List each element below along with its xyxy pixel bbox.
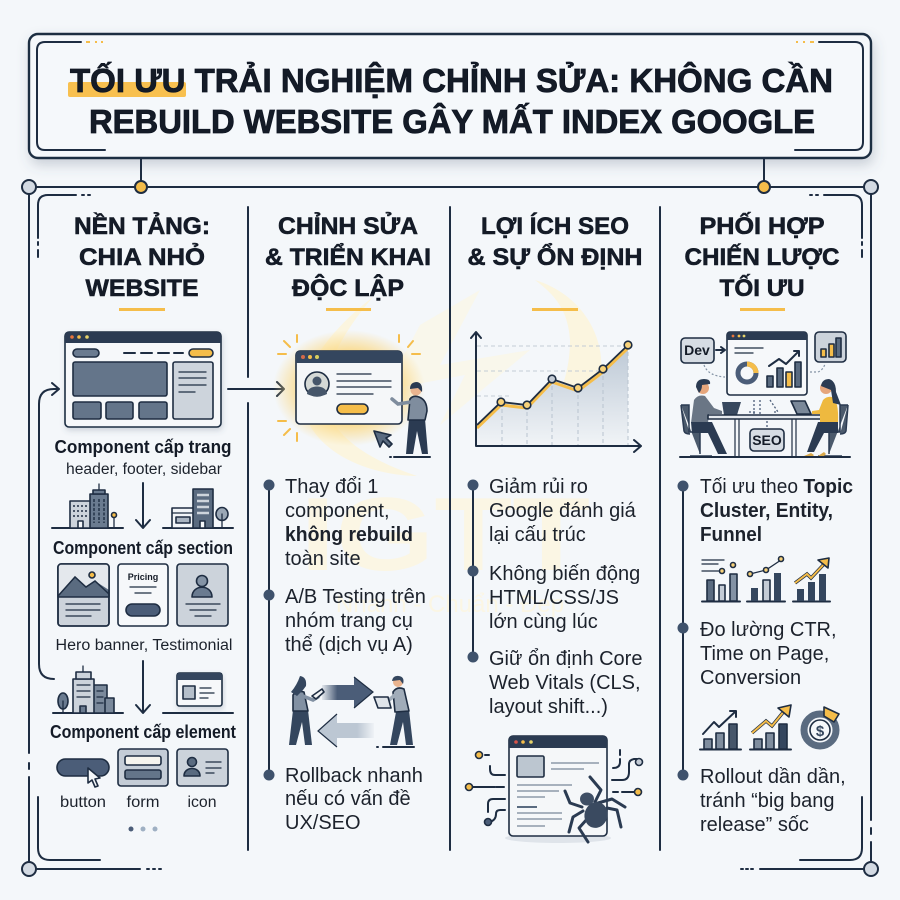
icons: funnel charts	[702, 556, 830, 602]
bullet: rollout: release” sốc	[700, 814, 809, 836]
bullet: rollout	[678, 766, 846, 836]
heading: phối hợp: TỐI ƯU	[720, 274, 804, 302]
icon: page layout browser	[65, 332, 221, 427]
bullet: core web vitals: layout shift...)	[489, 696, 608, 718]
heading: nền tảng: WEBSITE	[86, 275, 198, 302]
label: component cấp trang	[54, 437, 232, 478]
timeline	[268, 485, 270, 775]
bullet: thay đổi 1 component	[264, 476, 413, 570]
labels: button form icon: icon	[188, 794, 216, 811]
chart: rising line	[471, 332, 641, 452]
bullet: core web vitals	[468, 648, 642, 718]
heading: phối hợp: CHIẾN LƯỢC	[684, 243, 840, 271]
bullet: không biến động: HTML/CSS/JS	[489, 587, 619, 609]
pagination dots	[128, 826, 158, 832]
labels: button form icon	[60, 794, 216, 811]
card: pricing: Pricing	[128, 572, 158, 582]
card: hero banner	[58, 564, 109, 626]
bullet: đo lường: Time on Page,	[700, 643, 829, 665]
bullet: đo lường: Đo lường CTR,	[700, 619, 837, 641]
bullet: không biến động: lớn cùng lúc	[489, 611, 598, 633]
label: component cấp section: Component cấp section	[53, 538, 233, 558]
timeline	[682, 486, 684, 772]
bullet: giảm rủi ro: Giảm rủi ro	[489, 476, 588, 498]
watermark: IGTT	[300, 477, 590, 593]
panel: chỉnh sửa	[264, 211, 431, 834]
bullet: thay đổi 1 component: Thay đổi 1	[285, 476, 378, 498]
title text: TỐI ƯU TRẢI NGHIỆM CHỈNH SỬA: KHÔNG CẦN	[70, 61, 833, 99]
icon: contact card	[177, 749, 228, 786]
heading: chỉnh sửa	[265, 211, 431, 311]
label: hero banner, testimonial: Hero banner, Testimonial	[56, 637, 232, 654]
bullet: core web vitals: Web Vitals (CLS,	[489, 672, 641, 694]
icon: team collaboration: SEO	[752, 432, 782, 448]
bullet: core web vitals: Giữ ổn định Core	[489, 648, 642, 670]
bullet: rollback: UX/SEO	[285, 812, 361, 834]
bullet: giảm rủi ro: lại cấu trúc	[489, 524, 586, 546]
right person and chair	[804, 379, 848, 458]
arrow: down one	[136, 483, 150, 528]
icon: city left	[52, 484, 123, 528]
label: component cấp trang: Component cấp trang	[54, 437, 232, 457]
heading: lợi ích seo: & SỰ ỔN ĐỊNH	[468, 243, 642, 271]
bullet: a/b testing: thể (dịch vụ A)	[285, 634, 413, 656]
bullet: topic cluster: Cluster, Entity,	[700, 500, 833, 522]
bullet: thay đổi 1 component: component,	[285, 500, 390, 522]
heading: phối hợp	[684, 212, 840, 311]
icon: team collaboration: Dev	[684, 342, 710, 358]
icon: form	[118, 749, 168, 786]
heading: phối hợp: PHỐI HỢP	[700, 212, 824, 240]
icon: button	[57, 759, 109, 787]
arrow: down two	[136, 661, 150, 713]
icon: spider crawling page	[466, 736, 642, 843]
bullet: rollback: Rollback nhanh	[285, 765, 423, 787]
watermark	[300, 280, 601, 618]
icon: team collaboration	[680, 332, 850, 458]
left person and chair	[681, 379, 727, 456]
bullet: không biến động: Không biến động	[489, 563, 640, 585]
labels: button form icon: form	[126, 794, 160, 811]
timeline	[472, 485, 474, 657]
bullet: thay đổi 1 component: không rebuild	[285, 524, 413, 546]
card: pricing	[118, 564, 168, 626]
bullet: topic cluster: Tối ưu theo Topic	[700, 476, 853, 498]
heading: chỉnh sửa: ĐỘC LẬP	[292, 274, 404, 302]
panel: nền tảng	[39, 211, 284, 832]
bullet: rollback: nếu có vấn đề	[285, 788, 411, 810]
panel: phối hợp	[678, 212, 853, 836]
heading: nền tảng: NỀN TẢNG:	[74, 211, 210, 240]
panel: lợi ích seo	[466, 212, 642, 843]
heading: lợi ích seo	[468, 212, 642, 311]
icon: small browser	[163, 673, 233, 713]
card: testimonial	[177, 564, 228, 626]
label: component cấp element: Component cấp element	[50, 722, 236, 742]
icons: growth charts and dollar: $	[816, 723, 825, 740]
labels: button form icon: button	[60, 794, 106, 811]
heading: lợi ích seo: LỢI ÍCH SEO	[481, 212, 629, 240]
icon: two people exchanging	[289, 676, 414, 747]
bullet: đo lường	[678, 619, 837, 689]
bullet: a/b testing: A/B Testing trên	[285, 586, 426, 608]
title box: REBUILD WEBSITE GÂY MẤT INDEX GOOGLE	[89, 103, 815, 140]
icon: city lower left	[53, 666, 123, 713]
title box	[29, 34, 871, 158]
bullet: rollback	[264, 765, 423, 834]
bullet: topic cluster: Funnel	[700, 524, 762, 546]
title highlight	[68, 82, 186, 97]
heading: nền tảng: CHIA NHỎ	[79, 242, 205, 271]
bullet: a/b testing	[264, 586, 426, 656]
bullet: a/b testing: nhóm trang cụ	[285, 610, 413, 632]
bullet: rollout: tránh “big bang	[700, 790, 835, 812]
bullet: thay đổi 1 component: toàn site	[285, 548, 361, 570]
bullet: giảm rủi ro	[468, 476, 637, 546]
icon: edited component with person	[273, 330, 430, 457]
frame and connectors	[22, 158, 878, 876]
label: component cấp trang: header, footer, sidebar	[66, 461, 222, 478]
icon: city right	[163, 489, 233, 528]
bullet: giảm rủi ro: Google đánh giá	[489, 500, 637, 522]
bullet: đo lường: Conversion	[700, 667, 801, 689]
heading: chỉnh sửa: CHỈNH SỬA	[278, 211, 418, 240]
heading: chỉnh sửa: & TRIỂN KHAI	[265, 243, 431, 271]
bullet: không biến động	[468, 563, 640, 633]
arrow: to column 2	[228, 382, 284, 396]
heading: nền tảng	[74, 211, 210, 311]
icons: growth charts and dollar	[700, 705, 839, 750]
bullet: topic cluster	[678, 476, 853, 546]
bullet: rollout: Rollout dần dần,	[700, 766, 846, 788]
watermark: Nhanh - Chuẩn - Đẹp	[336, 591, 564, 618]
arrow: loop back	[39, 383, 59, 679]
